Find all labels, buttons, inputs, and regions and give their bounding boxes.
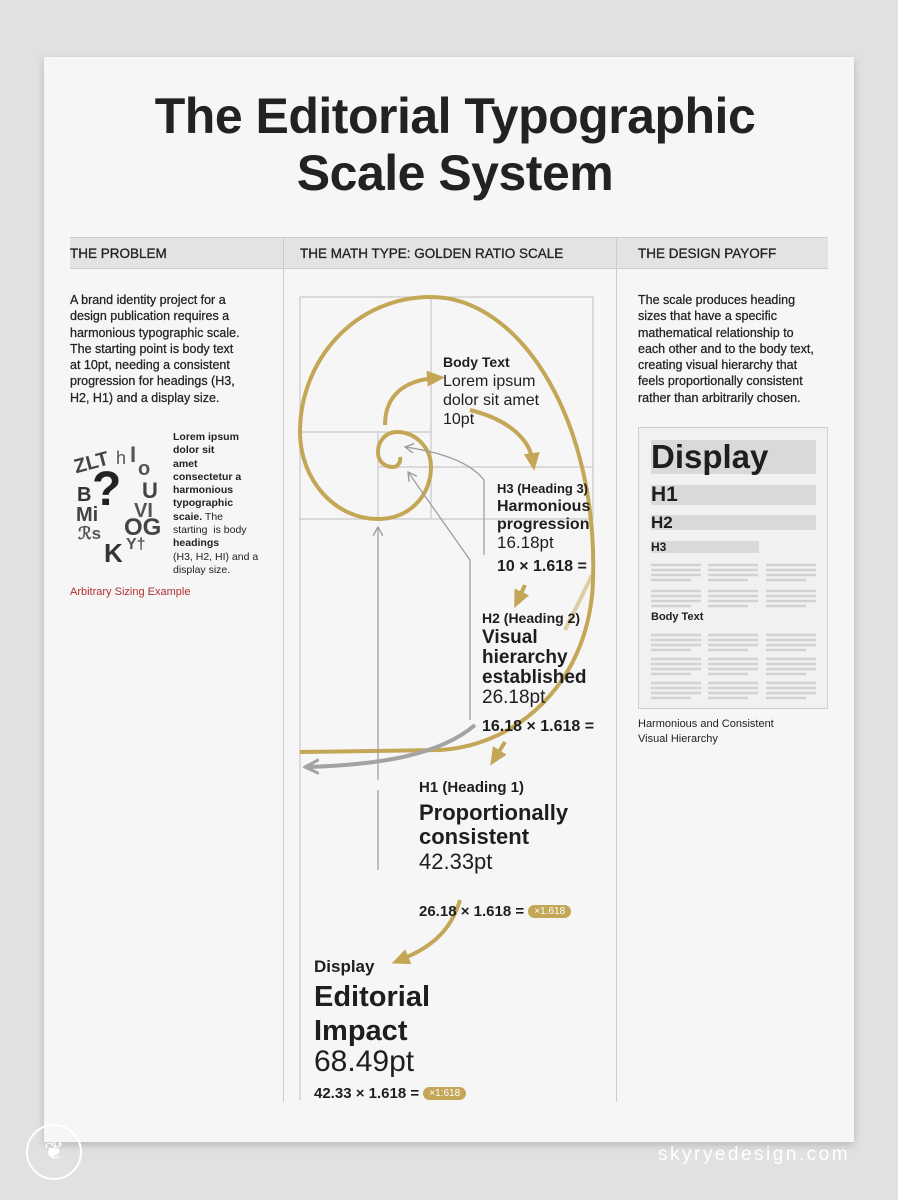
step: H1: [419, 779, 568, 874]
arbitrary text block: display size.: [173, 564, 230, 576]
step: body text: dolor sit amet: [443, 392, 539, 409]
step: H2: 16.18 × 1.618 =: [482, 718, 594, 735]
step: H1: Proportionally: [419, 800, 568, 824]
step: H3: [497, 481, 590, 575]
arbitrary text block: consectetur a: [173, 471, 241, 483]
payoff text: rather than arbitrarily chosen.: [638, 391, 801, 405]
arbitrary text block: scaie. The: [173, 511, 223, 523]
problem text: design publication requires a: [70, 309, 229, 323]
payoff text: creating visual hierarchy that: [638, 358, 797, 372]
title: [155, 88, 755, 201]
title: The Editorial Typographic: [155, 88, 755, 144]
step: H3: progression: [497, 516, 589, 533]
formula H1: 26.18 × 1.618 =: [419, 903, 524, 920]
arbitrary text block: Lorem ipsum: [173, 431, 239, 443]
caption: harmonious: [638, 718, 774, 745]
arbitrary text block: amet: [173, 458, 198, 470]
header: the design payoff: THE DESIGN PAYOFF: [638, 246, 776, 261]
payoff text: sizes that have a specific: [638, 309, 777, 323]
payoff text: feels proportionally consistent: [638, 374, 803, 388]
problem text: progression for headings (H3,: [70, 374, 235, 388]
step: H3: Harmonious: [497, 498, 590, 515]
watermark: skyryedesign.com: [658, 1144, 850, 1165]
problem text: [70, 293, 240, 405]
arbitrary text block: starting is body: [173, 524, 247, 536]
problem text: H2, H1) and a display size.: [70, 391, 219, 405]
step: H3: H3 (Heading 3): [497, 481, 588, 496]
step: H1: 42.33pt: [419, 848, 492, 874]
arbitrary text block: harmonious: [173, 484, 233, 496]
icon: chaotic letters cluster: [72, 442, 161, 568]
formula display: ×1:618: [429, 1088, 460, 1099]
big grey arrow: [305, 725, 475, 767]
gold arrows: [385, 378, 592, 960]
payoff text: mathematical relationship to: [638, 326, 794, 340]
mock page layout: Display: [651, 438, 768, 475]
header bar: [70, 237, 828, 269]
icon: chaotic letters cluster: Y†: [126, 536, 146, 553]
step: display: [314, 957, 430, 1078]
payoff text: each other and to the body text,: [638, 342, 814, 356]
step: H2: [482, 610, 594, 735]
step: H3: 16.18pt: [497, 533, 554, 552]
step: H2: 26.18pt: [482, 687, 545, 708]
icon: chaotic letters cluster: Mi: [76, 504, 98, 526]
icon: chaotic letters cluster: o: [138, 458, 150, 480]
formula display: [314, 1085, 466, 1102]
mock page layout: Body Text: [651, 611, 703, 623]
formula display: 42.33 × 1.618 =: [314, 1085, 419, 1102]
icon: chaotic letters cluster: B: [77, 484, 91, 506]
problem text: harmonious typographic scale.: [70, 326, 240, 340]
icon: chaotic letters cluster: VI: [134, 500, 153, 522]
payoff text: [638, 293, 814, 405]
caption: arbitrary sizing: Arbitrary Sizing Example: [70, 586, 190, 598]
icon: chaotic letters cluster: ZLT: [72, 448, 111, 478]
step: H2: hierarchy: [482, 647, 568, 668]
step: display: 68.49pt: [314, 1045, 414, 1078]
header: the math: THE MATH TYPE: GOLDEN RATIO SCALE: [300, 246, 563, 261]
step: display: Editorial: [314, 981, 430, 1013]
step: body text: [443, 354, 539, 428]
icon: chaotic letters cluster: K: [104, 538, 123, 568]
mock page layout: H2: [651, 513, 673, 532]
caption: harmonious: Harmonious and Consistent: [638, 718, 774, 730]
title: Scale System: [297, 145, 613, 201]
arbitrary text block: (H3, H2, HI) and a: [173, 551, 258, 563]
logo: wheat circle: ❦: [44, 1138, 64, 1165]
icon: chaotic letters cluster: h: [116, 448, 126, 468]
arbitrary text block: [173, 431, 258, 576]
step: H2: Visual: [482, 627, 538, 648]
arbitrary text block: headings: [173, 537, 219, 549]
grey pointer arrows: [378, 447, 484, 870]
payoff text: The scale produces heading: [638, 293, 795, 307]
step: H1: H1 (Heading 1): [419, 779, 524, 796]
icon: chaotic letters cluster: I: [130, 442, 136, 467]
formula H1: [419, 903, 571, 920]
step: display: Impact: [314, 1015, 407, 1047]
problem text: The starting point is body text: [70, 342, 233, 356]
formula H1: ×1.618: [534, 906, 565, 917]
mock page layout: H3: [651, 540, 666, 554]
step: H2: H2 (Heading 2): [482, 610, 580, 626]
spiral: [300, 297, 593, 752]
icon: chaotic letters cluster: U: [142, 478, 158, 503]
icon: chaotic letters cluster: OG: [124, 514, 161, 541]
mock page layout: [638, 427, 828, 709]
mock page layout: H1: [651, 483, 678, 506]
step: display: Display: [314, 957, 374, 976]
icon: chaotic letters cluster: ℛs: [78, 524, 101, 543]
icon: chaotic letters cluster: ?: [92, 463, 121, 516]
arbitrary text block: typographic: [173, 497, 233, 509]
step: H1: consistent: [419, 824, 529, 849]
step: H2: established: [482, 667, 587, 688]
step: body text: Lorem ipsum: [443, 373, 535, 390]
arbitrary text block: dolor sit: [173, 444, 214, 456]
header: the problem: THE PROBLEM: [70, 246, 167, 261]
logo: wheat circle: [26, 1124, 82, 1180]
step: H3: 10 × 1.618 =: [497, 558, 587, 575]
problem text: at 10pt, needing a consistent: [70, 358, 230, 372]
step: body text: Body Text: [443, 354, 510, 370]
step: body text: 10pt: [443, 411, 474, 428]
caption: harmonious: Visual Hierarchy: [638, 733, 718, 745]
problem text: A brand identity project for a: [70, 293, 226, 307]
